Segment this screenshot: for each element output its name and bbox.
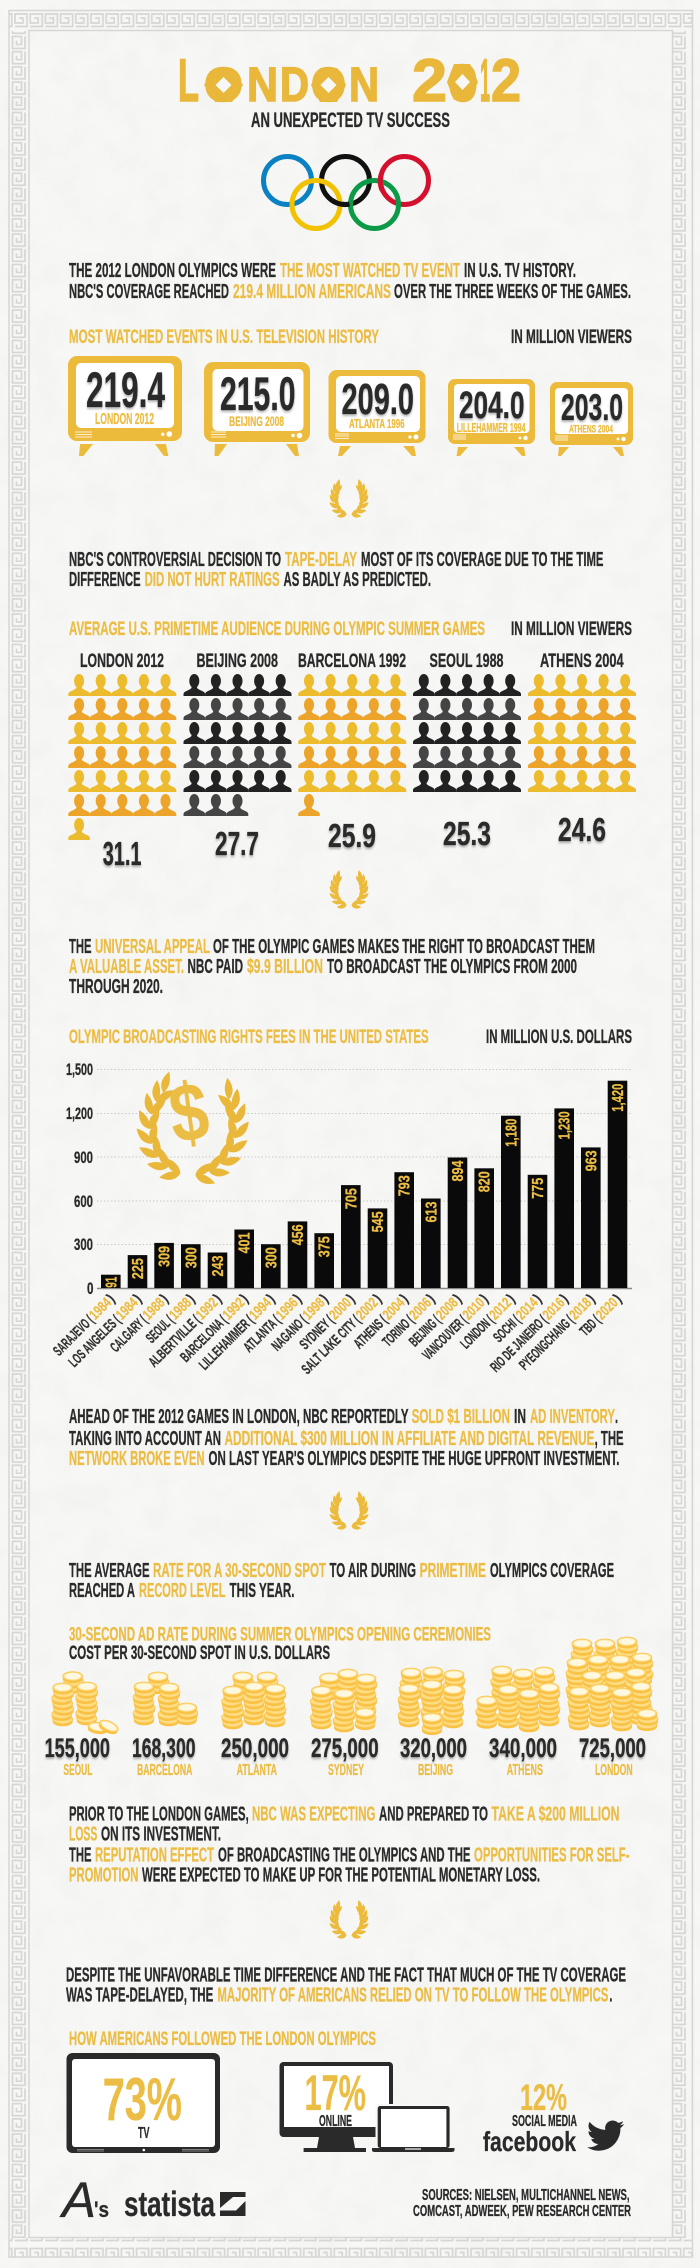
x axis labels: )	[158, 1291, 172, 1306]
tape-delay paragraph: AS BADLY AS PREDICTED.	[284, 568, 431, 591]
tape-delay paragraph: TAPE-DELAY	[285, 548, 357, 571]
coins: athens: ATHENS	[507, 1762, 543, 1779]
title: 0	[448, 55, 478, 113]
x axis labels: 2006	[407, 1295, 435, 1323]
x axis labels: LOS ANGELES (	[66, 1313, 124, 1371]
x axis labels: )	[184, 1291, 199, 1306]
expected loss paragraph: REPUTATION EFFECT	[95, 1844, 214, 1867]
x axis labels: 2020	[593, 1295, 622, 1323]
ad rate paragraph: THIS YEAR.	[230, 1579, 294, 1602]
ad inventory paragraph: TAKING INTO ACCOUNT AN	[69, 1427, 221, 1450]
y axis labels: 0	[87, 1279, 94, 1298]
heading: rights fees: OLYMPIC BROADCASTING RIGHTS FEES IN THE UNITED STATES	[69, 1026, 429, 1048]
x axis labels: 1996	[273, 1295, 302, 1323]
y axis labels: 1,500	[66, 1060, 93, 1079]
intro paragraph: NBC'S COVERAGE REACHED	[69, 280, 229, 303]
tape-delay paragraph: DID NOT HURT RATINGS	[145, 568, 280, 591]
x axis labels: 1998	[300, 1295, 328, 1323]
expected loss paragraph: AND PREPARED TO	[379, 1803, 488, 1826]
universal appeal paragraph: $9.9 BILLION	[247, 955, 323, 978]
logo: 4A's: A	[59, 2172, 96, 2228]
bar chart: rights fees	[51, 1060, 632, 1378]
x axis labels: )	[238, 1291, 252, 1306]
tv: beijing 2008: 215.0	[220, 367, 296, 420]
x axis labels: PYEONGCHANG (	[517, 1313, 577, 1374]
x axis labels: )	[131, 1291, 145, 1306]
social media 12%	[483, 2077, 624, 2157]
intro paragraph	[69, 259, 631, 303]
title: O	[311, 59, 346, 112]
universal appeal paragraph: UNIVERSAL APPEAL	[95, 935, 210, 958]
bar value labels: 894	[450, 1160, 467, 1182]
bar value labels: 401	[237, 1232, 254, 1254]
bar value labels: 613	[423, 1201, 440, 1222]
majority on tv paragraph	[66, 1964, 626, 2007]
tv: london 2012	[68, 356, 182, 456]
y axis labels: 900	[74, 1148, 93, 1167]
icon: laurel divider	[328, 1900, 370, 1939]
x axis labels: )	[371, 1291, 385, 1306]
bar value labels: 225	[130, 1258, 147, 1279]
pictogram: london 2012: 31.1	[103, 835, 142, 872]
title: 2	[412, 47, 447, 114]
social media 12%: 12%	[520, 2077, 567, 2118]
x axis labels: 2014	[513, 1295, 542, 1323]
pictogram: athens 2004	[528, 650, 636, 848]
icon: tablet tv 73%	[66, 2053, 220, 2153]
title: N	[349, 59, 379, 112]
x axis labels: )	[344, 1291, 359, 1306]
tv: lillehammer 1994: 204.0	[459, 385, 524, 427]
ad inventory paragraph: AD INVENTORY	[530, 1405, 615, 1428]
title	[178, 47, 521, 114]
tape-delay paragraph: DIFFERENCE	[69, 568, 141, 591]
x axis labels: )	[504, 1291, 519, 1306]
tv: london 2012: 219.4	[86, 362, 165, 418]
x axis labels: 1984	[87, 1295, 115, 1323]
icon: tablet tv 73%: TV	[138, 2125, 150, 2142]
x axis labels: TBD (	[577, 1313, 604, 1340]
coins: beijing: 320,000	[400, 1733, 467, 1763]
icon: laurel divider	[328, 870, 370, 909]
ad rate paragraph: THE AVERAGE	[69, 1559, 150, 1582]
expected loss paragraph: LOSS	[69, 1823, 97, 1846]
pictogram: london 2012	[68, 650, 176, 872]
ad inventory paragraph	[69, 1405, 624, 1470]
expected loss paragraph: NBC WAS EXPECTING	[252, 1803, 375, 1826]
x axis labels: 2012	[487, 1295, 515, 1323]
universal appeal paragraph: THE	[69, 935, 92, 958]
x axis labels: 1988	[140, 1295, 168, 1323]
coins: london	[566, 1637, 658, 1779]
expected loss paragraph	[69, 1803, 630, 1887]
coins: beijing: BEIJING	[418, 1762, 453, 1779]
ad inventory paragraph: AHEAD OF THE 2012 GAMES IN LONDON, NBC REPORTEDLY	[69, 1405, 409, 1428]
bar value labels: 300	[183, 1247, 200, 1268]
pictogram: beijing 2008	[184, 650, 292, 862]
tv: beijing 2008: BEIJING 2008	[229, 413, 284, 429]
ad inventory paragraph: .	[615, 1405, 618, 1428]
y axis labels	[66, 1060, 94, 1298]
bar value labels	[103, 1084, 627, 1288]
tape-delay paragraph: NBC'S CONTROVERSIAL DECISION TO	[69, 548, 281, 571]
x axis labels: )	[318, 1291, 332, 1306]
tv: london 2012: LONDON 2012	[95, 411, 154, 428]
x axis labels: )	[291, 1291, 305, 1306]
subtitle: AN UNEXPECTED TV SUCCESS	[251, 108, 450, 132]
intro paragraph: THE MOST WATCHED TV EVENT	[280, 259, 460, 282]
logo: 4A's: 's	[94, 2197, 109, 2222]
sources	[413, 2187, 631, 2220]
icon: monitor and laptop 17%	[280, 2062, 454, 2152]
x axis labels: 1988	[167, 1295, 195, 1323]
x axis labels: 2000	[327, 1295, 355, 1323]
tv: athens 2004: 203.0	[561, 386, 623, 428]
x axis labels: SARAJEVO (	[51, 1313, 97, 1359]
y axis labels: 1,200	[66, 1104, 93, 1123]
bar value labels: 705	[343, 1188, 360, 1209]
x axis labels: )	[611, 1291, 625, 1306]
x axis labels: )	[211, 1291, 225, 1306]
expected loss paragraph: THE	[69, 1844, 92, 1867]
bar value labels: 309	[157, 1246, 174, 1267]
x axis labels: 1992	[193, 1295, 222, 1323]
x axis labels: NAGANO (	[269, 1313, 311, 1354]
pictogram: london 2012: LONDON 2012	[80, 650, 164, 672]
olympic rings	[264, 156, 428, 228]
coins: london: 725,000	[579, 1733, 646, 1763]
pictogram: barcelona 1992: BARCELONA 1992	[298, 650, 406, 672]
icon: monitor and laptop 17%: ONLINE	[319, 2113, 352, 2130]
title: 1	[480, 47, 490, 114]
x axis labels: )	[398, 1291, 412, 1306]
icon: twitter bird	[587, 2120, 624, 2151]
coins: atlanta: 250,000	[221, 1733, 289, 1763]
x axis labels: ATLANTA (	[241, 1313, 284, 1356]
icon: monitor and laptop 17%: 17%	[304, 2065, 366, 2121]
bar value labels: 775	[530, 1178, 547, 1199]
x axis labels: 1994	[247, 1295, 275, 1323]
logo: 4A's	[59, 2172, 109, 2228]
x axis labels: SEOUL (	[143, 1313, 177, 1347]
coins: atlanta	[221, 1672, 289, 1779]
title: O	[204, 59, 243, 112]
bars	[101, 1081, 627, 1288]
x axis labels: )	[264, 1291, 279, 1306]
icon: laurel divider	[328, 479, 370, 518]
tv: atlanta 1996: ATLANTA 1996	[349, 416, 404, 431]
pictogram: seoul 1988	[413, 650, 521, 852]
coins: barcelona	[132, 1672, 198, 1779]
pictogram: beijing 2008: 27.7	[215, 825, 259, 862]
ad rate paragraph: REACHED A	[69, 1579, 135, 1602]
bar value labels: 963	[583, 1150, 600, 1171]
coins: barcelona: BARCELONA	[137, 1762, 193, 1779]
expected loss paragraph: OF BROADCASTING THE OLYMPICS AND THE	[218, 1844, 470, 1867]
tv: atlanta 1996	[328, 370, 426, 456]
title: N	[247, 59, 278, 112]
intro paragraph: IN U.S. TV HISTORY.	[464, 259, 576, 282]
x axis labels: TORINO (	[380, 1313, 417, 1350]
y axis labels: 300	[74, 1235, 93, 1254]
expected loss paragraph: ON ITS INVESTMENT.	[101, 1823, 221, 1846]
ad rate paragraph: TO AIR DURING	[330, 1559, 416, 1582]
pictogram: seoul 1988: 25.3	[443, 815, 491, 852]
expected loss paragraph: PRIOR TO THE LONDON GAMES,	[69, 1803, 249, 1826]
x axis labels: 2010	[460, 1295, 488, 1323]
x axis labels: 2018	[567, 1295, 595, 1323]
tv: athens 2004	[550, 382, 633, 456]
coins: sydney	[310, 1669, 379, 1779]
title: D	[280, 59, 309, 112]
social media 12%: SOCIAL MEDIA	[512, 2113, 577, 2130]
coins: seoul: SEOUL	[63, 1762, 93, 1779]
icon: laurel divider	[328, 1491, 370, 1530]
x axis labels: LONDON (	[458, 1313, 497, 1352]
chart gridlines and axis	[97, 1070, 632, 1288]
coins: seoul: 155,000	[45, 1733, 110, 1763]
x axis labels: 2016	[540, 1295, 568, 1323]
x axis labels: )	[104, 1291, 119, 1306]
ad rate paragraph: PRIMETIME	[420, 1559, 486, 1582]
ad inventory paragraph: NETWORK BROKE EVEN	[69, 1447, 204, 1470]
pictogram: athens 2004: 24.6	[558, 811, 606, 848]
majority on tv paragraph: WAS TAPE-DELAYED, THE	[66, 1984, 213, 2007]
pictogram: barcelona 1992: 25.9	[328, 817, 376, 854]
coins: seoul	[45, 1672, 120, 1779]
ad inventory paragraph: SOLD $1 BILLION	[412, 1405, 510, 1428]
bar value labels: 1,420	[610, 1084, 627, 1112]
x axis labels	[51, 1291, 625, 1378]
intro paragraph: THE 2012 LONDON OLYMPICS WERE	[69, 259, 276, 282]
heading: how americans followed: HOW AMERICANS FOLLOWED THE LONDON OLYMPICS	[69, 2028, 376, 2050]
x axis labels: 1984	[113, 1295, 142, 1323]
expected loss paragraph: TAKE A $200 MILLION	[492, 1803, 620, 1826]
expected loss paragraph: PROMOTION	[69, 1864, 138, 1887]
logo: statista: statista	[124, 2185, 215, 2224]
coins: atlanta: ATLANTA	[237, 1762, 277, 1779]
intro paragraph: 219.4 MILLION AMERICANS	[233, 280, 391, 303]
tv: athens 2004: ATHENS 2004	[569, 424, 614, 436]
pictogram: beijing 2008: BEIJING 2008	[196, 650, 278, 672]
coins: athens	[476, 1666, 560, 1779]
bar value labels: 1,180	[503, 1119, 520, 1147]
x axis labels: 1992	[220, 1295, 248, 1323]
tv: beijing 2008	[204, 362, 310, 456]
ad inventory paragraph: IN	[514, 1405, 526, 1428]
x axis labels: BARCELONA (	[178, 1313, 231, 1366]
bar value labels: 1,230	[557, 1111, 574, 1139]
x axis labels: SALT LAKE CITY (	[299, 1313, 364, 1378]
x axis labels: )	[424, 1291, 439, 1306]
bar value labels: 91	[103, 1277, 120, 1288]
heading: ad rate: COST PER 30-SECOND SPOT IN U.S. DOLLARS	[69, 1642, 330, 1664]
x axis labels: 2008	[433, 1295, 462, 1323]
x axis labels: ATHENS (	[351, 1313, 391, 1352]
bar value labels: 243	[210, 1255, 227, 1276]
icon: tablet tv 73%: 73%	[103, 2066, 182, 2133]
tv: atlanta 1996: 209.0	[342, 375, 414, 424]
coins: athens: 340,000	[489, 1733, 557, 1763]
x axis labels: VANCOUVER (	[420, 1313, 471, 1364]
bar value labels: 375	[317, 1236, 334, 1257]
bar value labels: 456	[290, 1224, 307, 1245]
x axis labels: 2004	[380, 1295, 408, 1323]
tape-delay paragraph	[69, 548, 604, 591]
universal appeal paragraph: A VALUABLE ASSET.	[69, 955, 184, 978]
pictogram: barcelona 1992	[298, 650, 406, 854]
x axis labels: 2002	[353, 1295, 382, 1323]
coins: london: LONDON	[595, 1762, 633, 1779]
pictogram: athens 2004: ATHENS 2004	[540, 650, 624, 672]
x axis labels: )	[558, 1291, 572, 1306]
coins: sydney: SYDNEY	[328, 1762, 364, 1779]
bar value labels: 300	[263, 1247, 280, 1268]
bar value labels: 545	[370, 1211, 387, 1232]
x axis labels: RIO DE JANEIRO (	[488, 1313, 551, 1376]
universal appeal paragraph: NBC PAID	[188, 955, 243, 978]
x axis labels: ALBERTVILLE (	[146, 1313, 204, 1371]
x axis labels: SOCHI (	[491, 1313, 524, 1346]
bar value labels: 820	[477, 1171, 494, 1192]
x axis labels: LILLEHAMMER (	[196, 1313, 257, 1374]
icon: dollar laurel: $	[164, 1065, 214, 1161]
majority on tv paragraph: .	[609, 1984, 612, 2007]
x axis labels: )	[451, 1291, 465, 1306]
social media 12%: facebook	[483, 2126, 576, 2157]
ad inventory paragraph: , THE	[595, 1427, 624, 1450]
tv: lillehammer 1994	[448, 379, 535, 456]
ad rate paragraph: RECORD LEVEL	[139, 1579, 226, 1602]
x axis labels: CALGARY (	[107, 1313, 151, 1356]
coins: barcelona: 168,300	[132, 1733, 196, 1763]
ad rate paragraph	[69, 1559, 614, 1602]
tv: lillehammer 1994: LILLEHAMMER 1994	[457, 421, 526, 435]
universal appeal paragraph: THROUGH 2020.	[69, 975, 163, 998]
heading: most watched events: MOST WATCHED EVENTS IN U.S. TELEVISION HISTORY	[69, 326, 379, 348]
universal appeal paragraph	[69, 935, 595, 998]
x axis labels: )	[584, 1291, 599, 1306]
x axis labels: BEIJING (	[406, 1313, 444, 1350]
x axis labels: )	[531, 1291, 545, 1306]
icon: dollar laurel	[128, 1065, 257, 1191]
title: 2	[491, 47, 521, 114]
x axis labels: SYDNEY (	[297, 1313, 337, 1353]
coins: sydney: 275,000	[311, 1733, 379, 1763]
x axis labels: )	[478, 1291, 492, 1306]
ad rate paragraph: RATE FOR A 30-SECOND SPOT	[153, 1559, 326, 1582]
title: L	[178, 47, 199, 114]
bar value labels: 793	[397, 1175, 414, 1196]
pictogram: seoul 1988: SEOUL 1988	[430, 650, 504, 672]
heading: ad rate	[69, 1624, 491, 1664]
y axis labels: 600	[74, 1192, 93, 1211]
coins: beijing	[398, 1667, 467, 1779]
